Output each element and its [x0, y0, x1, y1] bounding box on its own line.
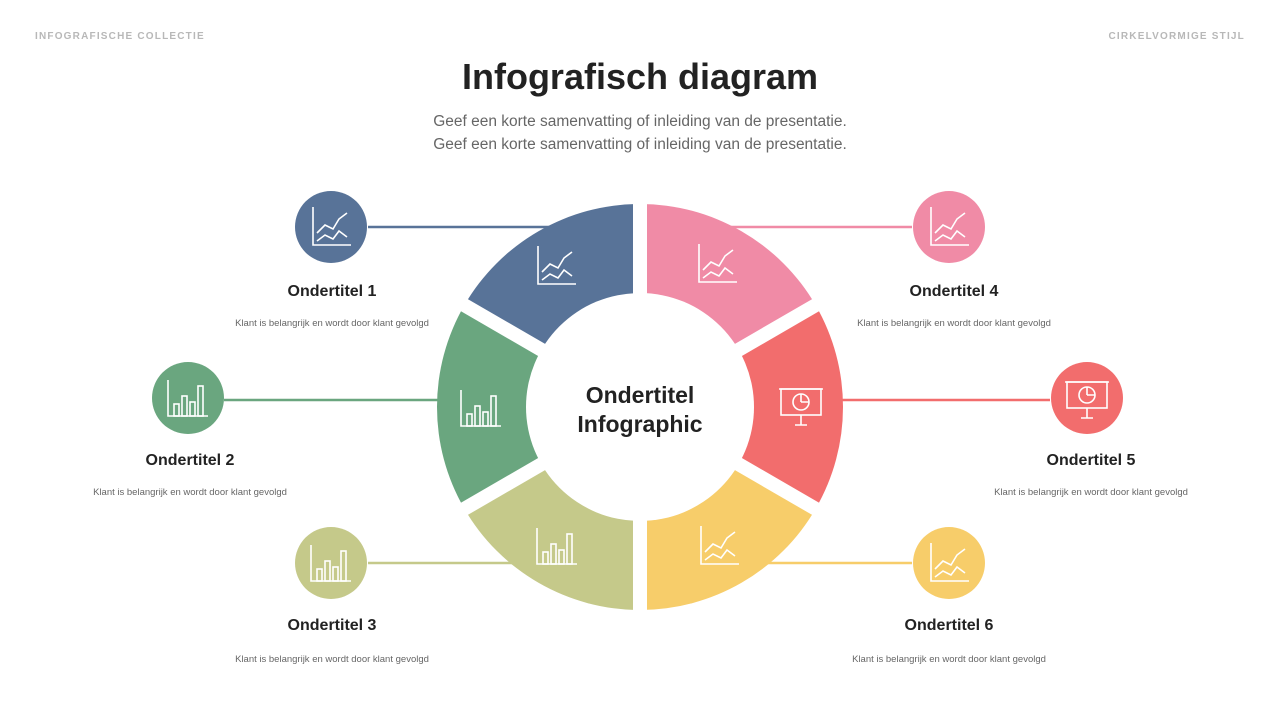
- center label: Ondertitel: [586, 382, 694, 408]
- item 4: [857, 283, 1051, 329]
- segment icons: [461, 244, 823, 564]
- subtitle: [433, 113, 847, 153]
- item 5: [994, 452, 1188, 498]
- item 6: [852, 617, 1046, 665]
- item 3: Ondertitel 3: [288, 617, 376, 634]
- title: Infografisch diagram: [462, 56, 818, 97]
- header tag left: INFOGRAFISCHE COLLECTIE: [35, 31, 205, 42]
- center label: [577, 382, 703, 437]
- item 1: [235, 283, 429, 329]
- item 1: Klant is belangrijk en wordt door klant gevolgd: [235, 318, 429, 329]
- subtitle: Geef een korte samenvatting of inleiding van de presentatie.: [433, 136, 847, 153]
- item 3: [235, 617, 429, 665]
- item 5: Klant is belangrijk en wordt door klant gevolgd: [994, 487, 1188, 498]
- item 6: Ondertitel 6: [905, 617, 993, 634]
- item 4: Ondertitel 4: [910, 283, 998, 300]
- item 6: Klant is belangrijk en wordt door klant gevolgd: [852, 654, 1046, 665]
- header tag right: CIRKELVORMIGE STIJL: [1108, 31, 1245, 42]
- connector lines: [224, 227, 1050, 563]
- item 3: Klant is belangrijk en wordt door klant gevolgd: [235, 654, 429, 665]
- subtitle: Geef een korte samenvatting of inleiding van de presentatie.: [433, 113, 847, 130]
- center label: Infographic: [577, 411, 703, 437]
- item 2: Ondertitel 2: [146, 452, 234, 469]
- outer icon circles: [152, 191, 1123, 599]
- item 5: Ondertitel 5: [1047, 452, 1135, 469]
- ring segments: [437, 190, 843, 625]
- item 1: Ondertitel 1: [288, 283, 376, 300]
- item 4: Klant is belangrijk en wordt door klant gevolgd: [857, 318, 1051, 329]
- item 2: [93, 452, 287, 498]
- item 2: Klant is belangrijk en wordt door klant gevolgd: [93, 487, 287, 498]
